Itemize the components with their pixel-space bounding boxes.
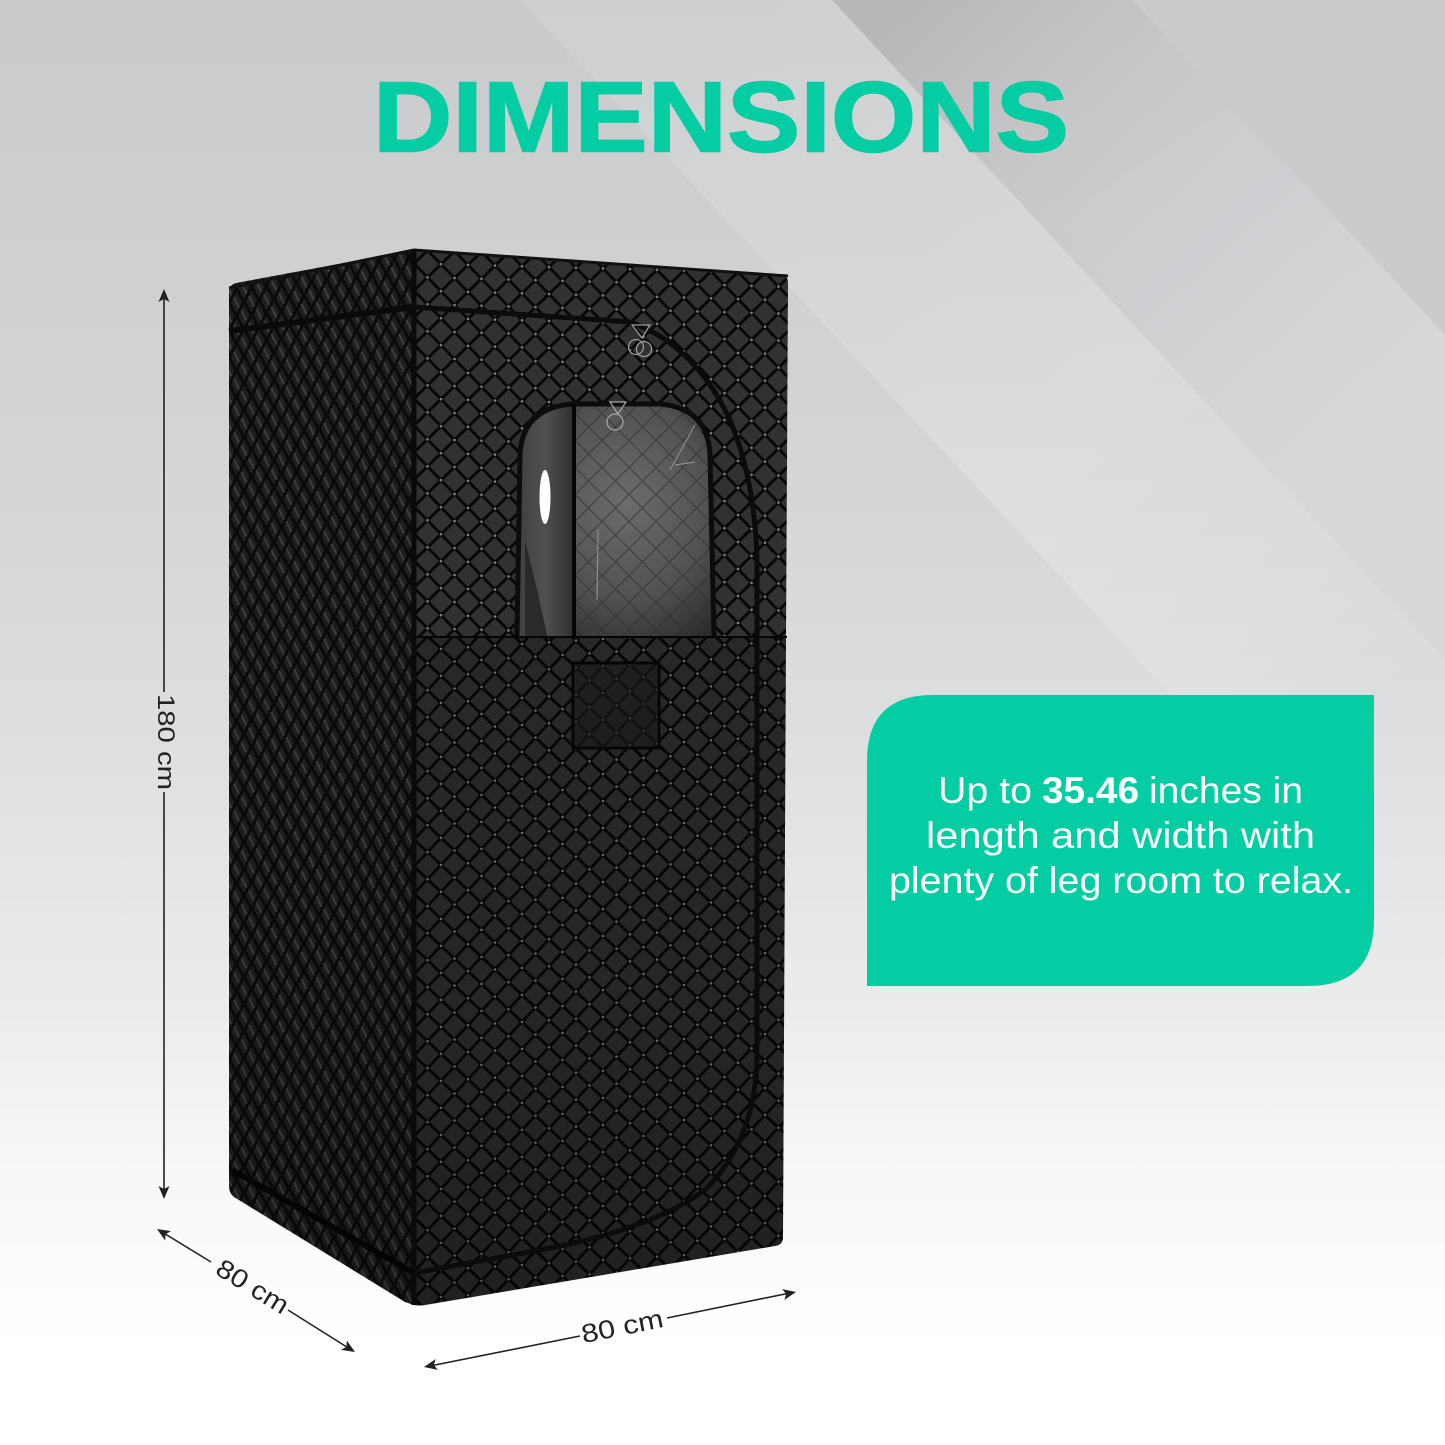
width dimension: 80 cm <box>423 1287 797 1372</box>
clear window <box>515 400 716 640</box>
product: quilted tent <box>229 250 788 1306</box>
callout text: 35.46 <box>1042 770 1139 811</box>
height dimension: 180 cm <box>152 289 179 1199</box>
height dimension: 180 cm: 180 cm <box>152 694 179 790</box>
callout panel <box>867 695 1374 986</box>
door zip pull <box>628 325 652 356</box>
callout text: inches in <box>1149 770 1303 811</box>
depth dimension: 80 cm <box>154 1224 358 1357</box>
callout text: plenty of leg room to relax. <box>889 860 1353 901</box>
tent front lower shading <box>414 637 786 1306</box>
pocket <box>573 663 659 748</box>
left bottom strap <box>232 1170 414 1273</box>
title: DIMENSIONS <box>373 62 1069 174</box>
tent top edge <box>229 250 788 288</box>
width dimension: 80 cm: 80 cm <box>579 1303 666 1349</box>
tent front lower face <box>414 637 786 1306</box>
window highlight <box>540 470 550 524</box>
corner seam <box>412 250 416 1305</box>
callout text: Up to <box>938 770 1032 811</box>
tent left side shading <box>229 250 414 1305</box>
tent left side face <box>229 250 414 1305</box>
door zipper <box>414 307 757 1273</box>
tent front upper face <box>414 250 788 637</box>
depth dimension: 80 cm: 80 cm <box>211 1253 295 1320</box>
window zip pull <box>607 402 626 430</box>
callout text: length and width with <box>926 815 1315 856</box>
callout text <box>889 770 1353 901</box>
horizontal seam <box>414 636 787 638</box>
callout background <box>867 695 1374 986</box>
left side zip <box>229 307 414 331</box>
